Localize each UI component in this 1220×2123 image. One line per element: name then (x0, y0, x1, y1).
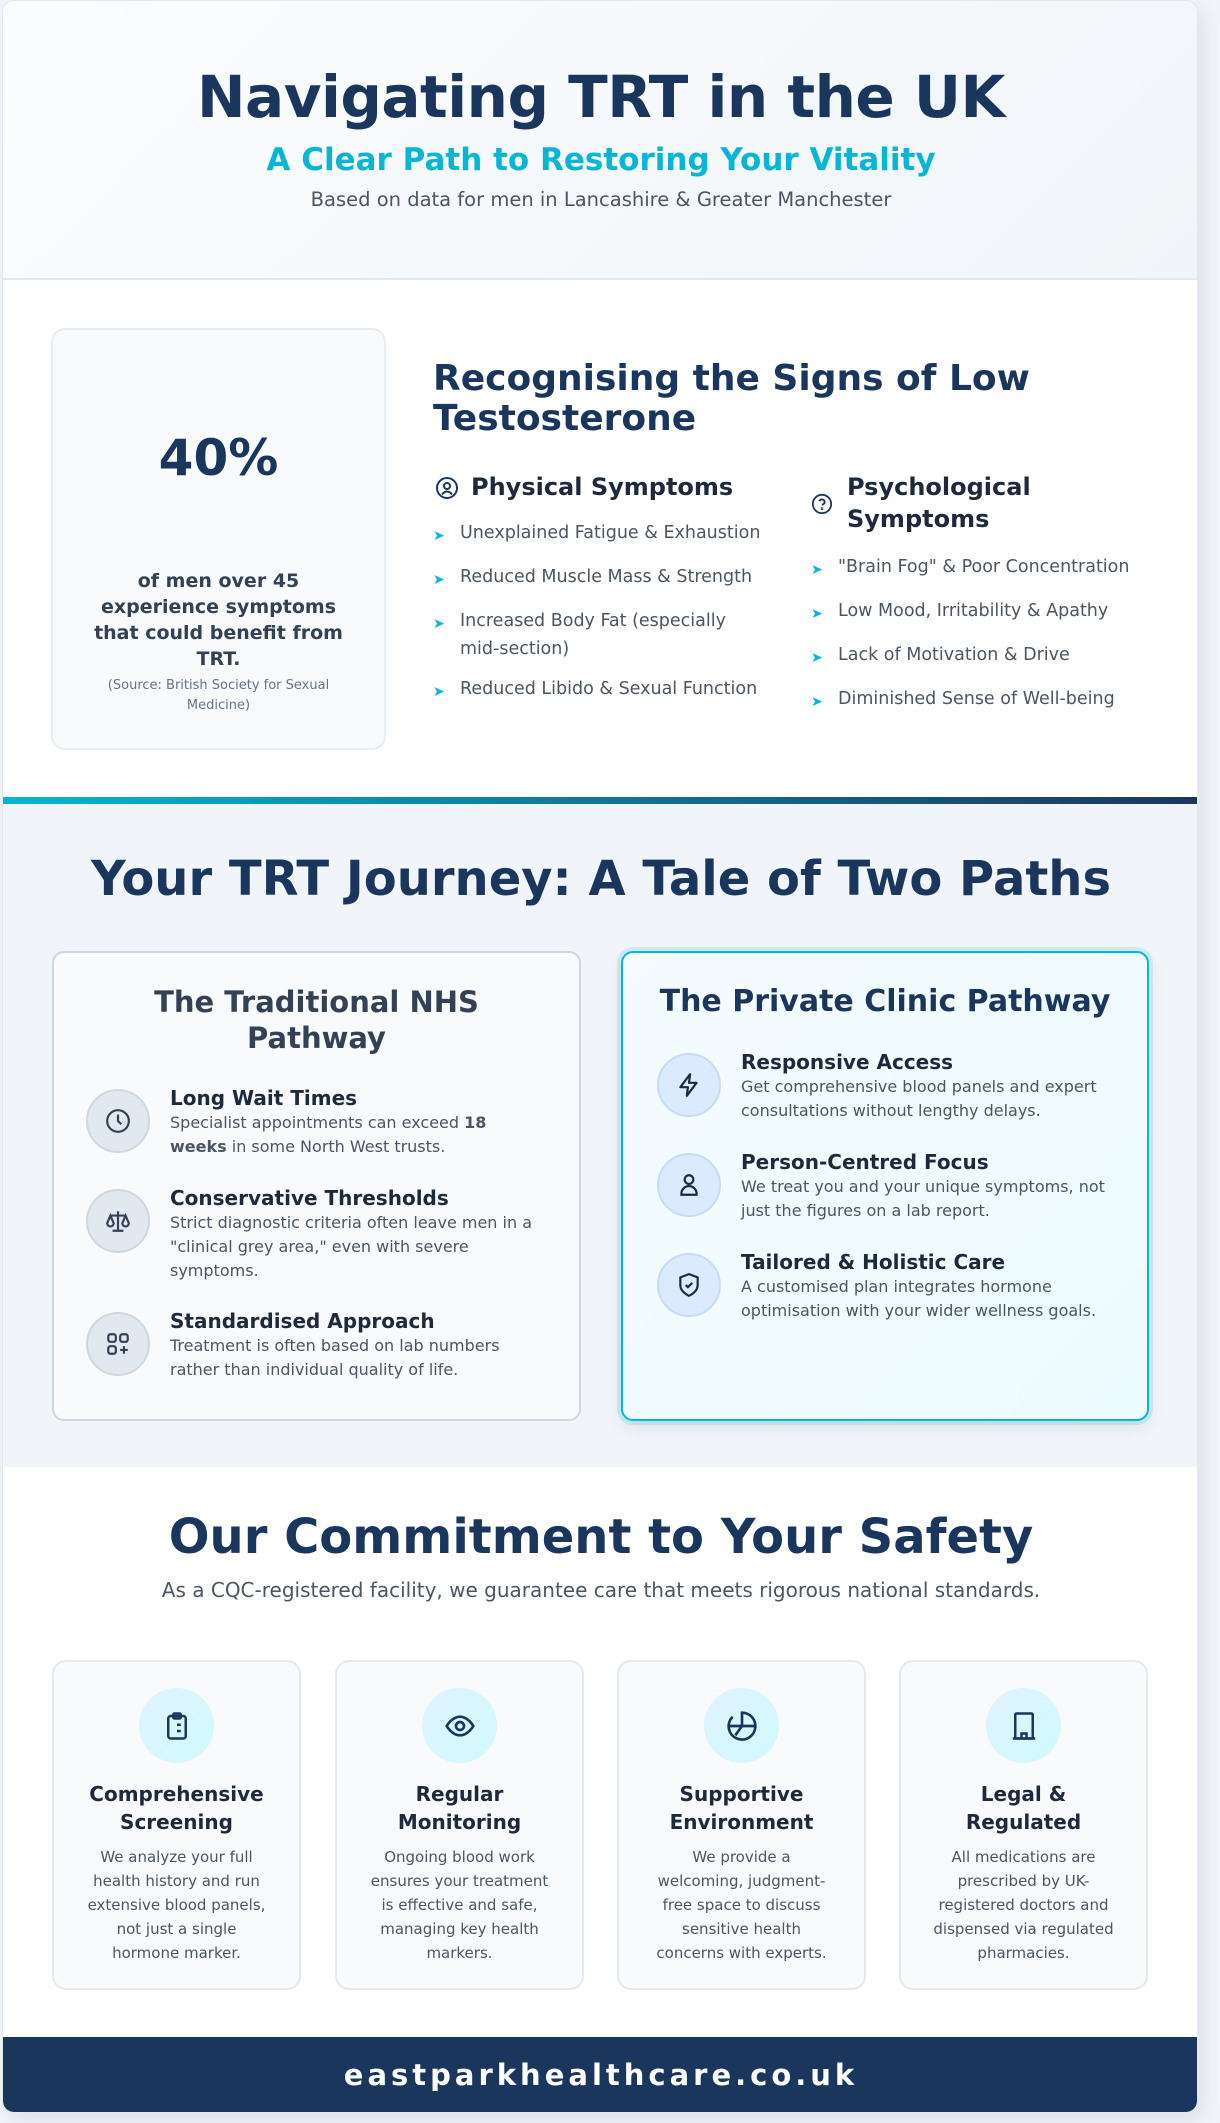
item: person-centred: Person-Centred Focus (741, 1150, 989, 1174)
item: thresholds: Strict diagnostic criteria often leave men in a "clinical grey area," even with severe symptoms. (170, 1213, 532, 1280)
stat number: 40% (159, 429, 278, 487)
psych list: Diminished Sense of Well-being (838, 689, 1115, 709)
physical symptoms column (434, 473, 760, 699)
journey heading: Your TRT Journey: A Tale of Two Paths (91, 851, 1111, 907)
source: (Source: British Society for Sexual Medicine) (108, 678, 329, 713)
item: standardised: Treatment is often based on lab numbers rather than individual quality of life. (170, 1336, 500, 1379)
icon: question circle (812, 494, 832, 514)
item: standardised: Standardised Approach (170, 1309, 435, 1333)
card: legal: All medications are prescribed by UK-registered doctors and dispensed via regulated pharmacies. (933, 1848, 1114, 1962)
psych list: Lack of Motivation & Drive (838, 645, 1070, 665)
safety heading: Our Commitment to Your Safety (169, 1509, 1033, 1565)
item: long wait: Long Wait Times (170, 1086, 357, 1110)
card: screening (52, 1660, 301, 1990)
icon: person (657, 1153, 721, 1217)
stat text: of men over 45 experience symptoms that could benefit from TRT. (94, 570, 343, 670)
heading psych: Psychological (847, 473, 1031, 501)
heading psych: Symptoms (847, 505, 989, 533)
heading psych (812, 473, 1031, 533)
icon: grid plus (86, 1312, 150, 1376)
card: legal: Legal & Regulated (966, 1782, 1081, 1834)
safety subtitle: As a CQC-registered facility, we guarantee care that meets rigorous national standards. (162, 1578, 1040, 1602)
physical list (434, 523, 760, 699)
icon: pie (704, 1688, 779, 1763)
icon: building (986, 1688, 1061, 1763)
card: monitoring (335, 1660, 584, 1990)
panel: NHS pathway (52, 951, 581, 1421)
psych list (812, 557, 1129, 709)
item: thresholds (86, 1186, 532, 1280)
stat card (51, 328, 386, 750)
header (3, 1, 1199, 280)
panel: private pathway (621, 951, 1149, 1421)
icon: scales (86, 1189, 150, 1253)
heading physical: Physical Symptoms (471, 473, 733, 501)
item: standardised (86, 1309, 500, 1379)
card: screening: We analyze your full health history and run extensive blood panels, not just a single hormone marker. (88, 1848, 265, 1962)
card: monitoring: Regular Monitoring (398, 1782, 521, 1834)
item: person-centred (657, 1150, 1105, 1220)
card: screening: Comprehensive Screening (89, 1782, 264, 1834)
title: Navigating TRT in the UK (197, 63, 1005, 131)
item: responsive: Get comprehensive blood panels and expert consultations without lengthy delays. (741, 1077, 1097, 1120)
physical list: Increased Body Fat (especially mid-section) (460, 611, 726, 659)
item: tailored (657, 1250, 1096, 1320)
item: person-centred: We treat you and your unique symptoms, not just the figures on a lab report. (741, 1177, 1105, 1220)
icon: clipboard (139, 1688, 214, 1763)
icon: clock (86, 1089, 150, 1153)
journey section (3, 797, 1199, 1467)
psych list: Low Mood, Irritability & Apathy (838, 601, 1108, 621)
physical list: Unexplained Fatigue & Exhaustion (460, 523, 760, 543)
icon: shield check (657, 1253, 721, 1317)
signs heading: Recognising the Signs of Low Testosterone (433, 358, 1030, 439)
subtitle: A Clear Path to Restoring Your Vitality (266, 142, 936, 178)
item: tailored: A customised plan integrates hormone optimisation with your wider wellness goals. (741, 1277, 1096, 1320)
item: responsive: Responsive Access (741, 1050, 953, 1074)
physical list: Reduced Libido & Sexual Function (460, 679, 757, 699)
private title: The Private Clinic Pathway (660, 984, 1110, 1019)
NHS title: The Traditional NHS Pathway (154, 985, 479, 1055)
location note: Based on data for men in Lancashire & Greater Manchester (311, 188, 891, 211)
psychological symptoms column (812, 473, 1129, 709)
item: responsive (657, 1050, 1097, 1120)
card: supportive: Supportive Environment (670, 1782, 813, 1834)
card: supportive (617, 1660, 866, 1990)
footer (3, 2037, 1199, 2114)
physical list: Reduced Muscle Mass & Strength (460, 567, 752, 587)
card: supportive: We provide a welcoming, judgment-free space to discuss sensitive health concerns with experts. (656, 1848, 827, 1962)
item: long wait (86, 1086, 486, 1156)
card: legal (899, 1660, 1148, 1990)
footer: eastparkhealthcare.co.uk (344, 2058, 858, 2092)
item: thresholds: Conservative Thresholds (170, 1186, 449, 1210)
icon: person circle (436, 477, 458, 499)
item: tailored: Tailored & Holistic Care (741, 1250, 1005, 1274)
psych list: "Brain Fog" & Poor Concentration (838, 557, 1129, 577)
card: monitoring: Ongoing blood work ensures your treatment is effective and safe, managing key health markers. (371, 1848, 548, 1962)
icon: bolt (657, 1053, 721, 1117)
icon: eye (422, 1688, 497, 1763)
item: long wait: Specialist appointments can exceed 18 weeks in some North West trusts. (170, 1113, 486, 1156)
